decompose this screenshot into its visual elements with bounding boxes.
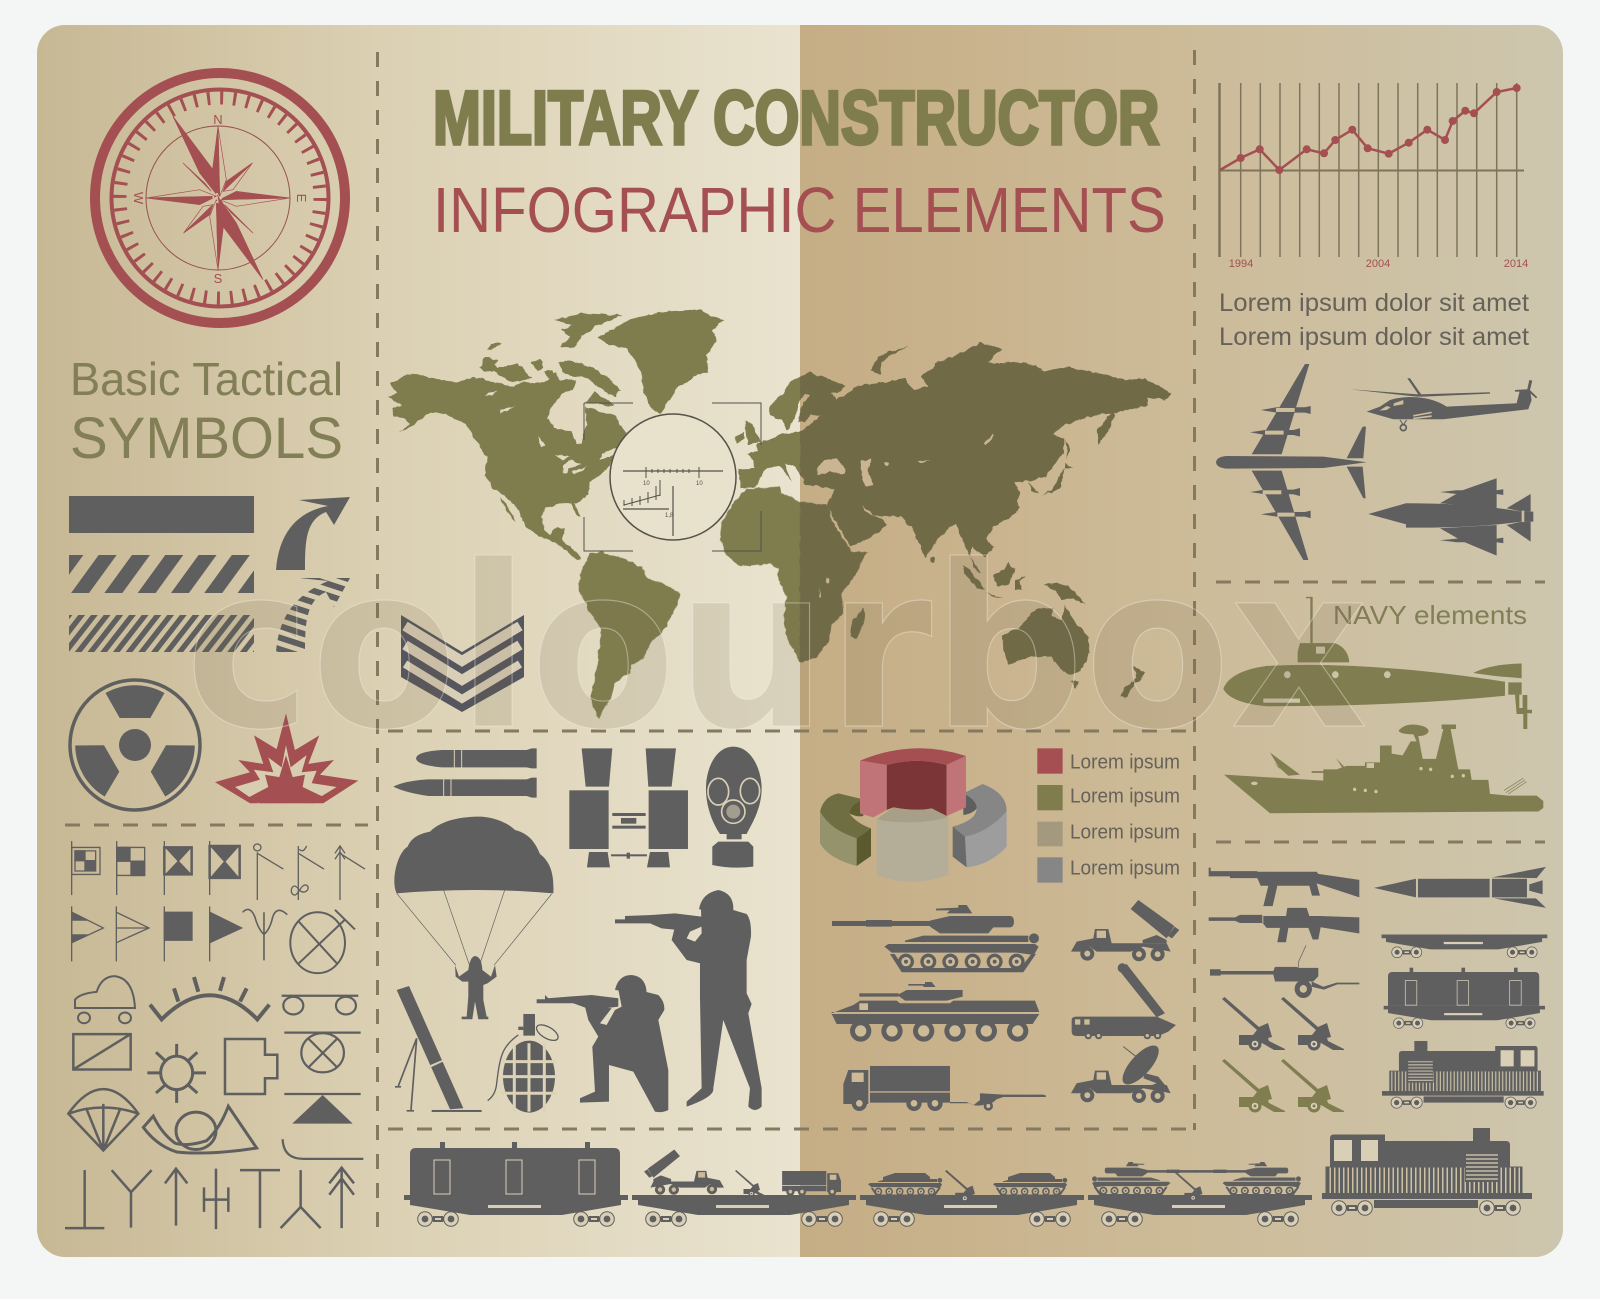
icon: sniper scope reticle: 10	[643, 481, 650, 487]
crossed circle with handle	[290, 910, 355, 973]
icon: binoculars	[569, 748, 688, 867]
bottom glyph 4	[204, 1169, 228, 1229]
pennant 5	[254, 844, 283, 900]
icon: assault rifle 1	[1209, 868, 1359, 906]
aircraft group	[1216, 364, 1537, 560]
symbol: wheels on line	[282, 996, 358, 1014]
map: southeast asia, australia, new zealand	[962, 563, 1145, 697]
flag 10	[164, 906, 192, 961]
icon: compass: N	[213, 112, 223, 127]
subtitle: INFOGRAPHIC ELEMENTS	[433, 174, 1166, 246]
icon: armoured personnel carrier	[832, 982, 1039, 1042]
icon: solid curved arrow	[276, 497, 350, 570]
icon: howitzer grey 1	[1222, 997, 1285, 1050]
icon: locomotive	[1322, 1128, 1532, 1215]
chart: line chart 1994-2014: 2004	[1366, 258, 1390, 270]
icon: bomber plane	[1216, 364, 1367, 560]
map: south america and africa	[578, 487, 867, 718]
icon: compass	[95, 73, 345, 323]
bottom glyph 6	[281, 1170, 321, 1228]
text block: lorem ipsum: Lorem ipsum dolor sit amet	[1219, 323, 1529, 351]
symbol: car outline	[75, 976, 135, 1023]
symbol: battery block	[225, 1039, 277, 1094]
bottom glyph 5	[240, 1170, 280, 1228]
icon: helicopter	[1350, 378, 1537, 431]
icon: right locomotive	[1382, 1041, 1544, 1108]
symbol: parachute	[68, 1089, 138, 1150]
icon: missile launcher truck	[1072, 963, 1176, 1039]
flag 8	[72, 906, 103, 961]
pennant 7	[335, 846, 365, 900]
icon: howitzer olive 1	[1222, 1059, 1285, 1112]
heading: navy elements: NAVY elements	[1333, 600, 1527, 630]
icon: standing soldier	[615, 890, 762, 1110]
flag 3	[164, 841, 192, 895]
icon: right flat wagon	[1382, 935, 1547, 958]
icon: compass: S	[214, 271, 223, 286]
navy group	[1223, 597, 1543, 813]
icon: gas mask	[706, 747, 762, 868]
icon: warship	[1224, 724, 1543, 813]
icon: box wagon	[404, 1142, 628, 1226]
icon: wide hazard stripe bar	[69, 555, 254, 593]
small arms and artillery group	[1209, 868, 1359, 998]
flag 2	[117, 841, 145, 895]
tactical symbols: flags and markers	[65, 841, 365, 1229]
ground vehicles group	[832, 900, 1179, 1111]
icon: field gun	[1210, 945, 1359, 998]
chart: line chart 1994-2014	[1219, 83, 1528, 270]
chart: line chart 1994-2014: 1994	[1229, 258, 1253, 270]
legend: Lorem ipsum	[1070, 857, 1180, 879]
icon: howitzer olive 2	[1281, 1059, 1344, 1112]
icon: grenade	[488, 1014, 561, 1113]
icon: flat wagon with two tanks	[1088, 1162, 1312, 1226]
panel: background right half	[800, 25, 1563, 1257]
icon: mortar	[395, 986, 482, 1112]
symbol: struck rectangle	[73, 1034, 131, 1069]
symbol: crossed ellipse under line	[284, 1033, 361, 1072]
icon: missile	[1374, 867, 1546, 908]
icon: howitzer grey 2	[1281, 997, 1344, 1050]
icon: assault rifle 2	[1209, 908, 1359, 942]
bottom glyph 1	[65, 1170, 104, 1228]
trident	[243, 909, 287, 960]
chart segment: olive	[820, 793, 871, 866]
flag 9	[116, 906, 149, 961]
map: eurasia	[735, 342, 1172, 573]
watermark: colourbox	[185, 517, 1368, 779]
3d donut chart and legend	[820, 748, 1180, 883]
train along bottom	[404, 1128, 1532, 1226]
icon: parachutist	[394, 817, 553, 1019]
icon: narrow hazard stripe bar	[69, 615, 254, 652]
icon: main battle tank	[832, 905, 1039, 972]
map: north america, arctic islands, greenland	[388, 309, 724, 560]
icon: compass: W	[131, 192, 146, 205]
legend	[1037, 748, 1180, 883]
heading: basic tactical symbols: Basic Tactical	[70, 353, 343, 405]
icon: sniper scope reticle: 1,8	[665, 513, 674, 519]
legend: Lorem ipsum	[1070, 822, 1180, 844]
world map	[388, 309, 1172, 718]
legend: Lorem ipsum	[1070, 751, 1180, 773]
chart segment: tan	[877, 807, 948, 882]
bottom glyph 2	[112, 1170, 152, 1228]
bottom glyph 3	[165, 1169, 187, 1226]
panel: background left half	[37, 25, 800, 1257]
icon: submarine	[1223, 597, 1532, 729]
military equipment group	[393, 747, 762, 1113]
icon: bullets	[393, 748, 537, 798]
icon: fighter jet	[1368, 478, 1533, 556]
symbol: hunting horn	[143, 1106, 257, 1153]
icon: kneeling soldier	[537, 975, 668, 1112]
symbol: triangle under line	[284, 1094, 361, 1122]
icon: flat wagon with launcher, gun and truck	[632, 1150, 856, 1226]
icon: striped curved arrow	[276, 578, 350, 652]
icon: compass: E	[294, 194, 309, 203]
legend: Lorem ipsum	[1070, 786, 1180, 808]
bottom glyph 7	[329, 1168, 354, 1228]
icon: truck towing gun	[843, 1066, 1046, 1111]
flag 11	[210, 906, 242, 961]
icon: radiation symbol	[69, 680, 201, 810]
icon: explosion	[215, 713, 358, 803]
icon: solid bar	[69, 496, 254, 533]
symbol: sun gear	[147, 1044, 206, 1103]
icon: rocket launcher truck	[1071, 900, 1179, 961]
flag 4	[210, 841, 240, 895]
text block: lorem ipsum	[1219, 289, 1529, 351]
heading: basic tactical symbols: SYMBOLS	[70, 406, 343, 471]
icon: flat wagon with two light tanks	[860, 1170, 1084, 1226]
pennant 6	[291, 846, 324, 900]
symbol: arc with ticks	[150, 977, 269, 1019]
icon: sniper scope reticle	[584, 403, 761, 551]
symbol: curved line	[283, 1139, 363, 1159]
heading: basic tactical symbols	[70, 353, 343, 471]
flag 1	[72, 841, 100, 895]
title: MILITARY CONSTRUCTOR	[433, 76, 1159, 161]
icon: right box wagon	[1384, 968, 1545, 1028]
icon: sergeant chevron	[401, 615, 524, 712]
icon: radar dish truck	[1071, 1040, 1171, 1103]
chart: line chart 1994-2014: 2014	[1504, 258, 1528, 270]
chart segment: red	[860, 748, 966, 817]
chart segment: grey	[953, 784, 1007, 867]
text block: lorem ipsum: Lorem ipsum dolor sit amet	[1219, 289, 1529, 317]
icon: sniper scope reticle: 10	[696, 481, 703, 487]
